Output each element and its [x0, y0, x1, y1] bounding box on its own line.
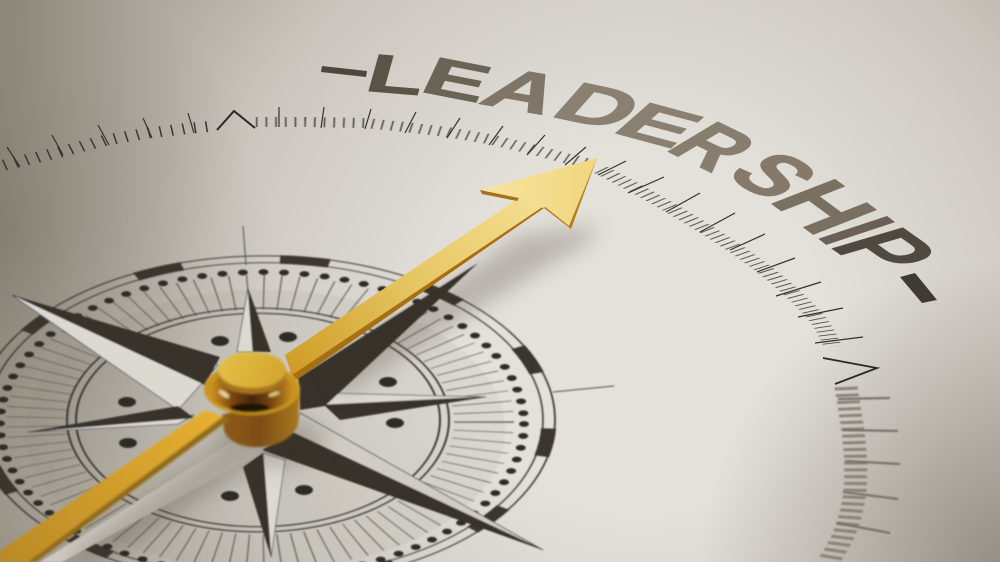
inner double ring: [67, 308, 449, 532]
needle shadow: [60, 225, 600, 562]
arrow head: [480, 158, 597, 226]
letter S: S: [706, 141, 841, 210]
minor ticks: left section: [4, 126, 216, 165]
compass rose dial: [0, 226, 614, 562]
lower major ticks: [837, 398, 900, 533]
hub cap side: [218, 358, 286, 394]
dots ring: [0, 272, 524, 562]
hub highlights: [218, 389, 230, 399]
hub cap: [218, 352, 286, 388]
letter I: I: [793, 206, 921, 255]
needle shaft: [285, 198, 544, 375]
needle shaft edge: [290, 205, 544, 380]
letter R: R: [648, 111, 778, 182]
major ticks: [7, 107, 863, 343]
hub flange recess: [210, 370, 294, 412]
arrow head edge: [544, 158, 597, 229]
gold compass needle: [0, 158, 597, 562]
letter A: A: [468, 57, 578, 127]
leading dash: [321, 66, 367, 77]
minor ticks: lower right section: [828, 387, 856, 562]
needle tail: [0, 410, 230, 562]
hub flange: [204, 363, 300, 415]
south-west light band: [40, 437, 265, 562]
letter H: H: [746, 168, 902, 246]
arrow barb edge: [480, 190, 519, 201]
inner dots: [118, 332, 404, 501]
letter E: E: [413, 46, 501, 114]
light star facets: [12, 288, 543, 557]
minor ticks: middle section: [256, 122, 590, 164]
dark star facets: [12, 263, 543, 557]
minor ticks: right section: [601, 170, 833, 347]
letter L: L: [360, 44, 433, 107]
letter D: D: [538, 71, 658, 142]
hub dark band: [230, 404, 270, 412]
hub: [204, 352, 300, 447]
tick scale arc: [4, 107, 900, 562]
outer ring: [0, 256, 555, 562]
title: LEADERSHIP curved lettering: [321, 44, 966, 303]
letter P: P: [804, 218, 966, 284]
shading under dial: [25, 290, 505, 562]
north and east pointer lines: [243, 226, 614, 392]
hub lower body: [222, 392, 300, 447]
trailing dash: [900, 273, 937, 303]
letter E: E: [598, 92, 719, 159]
top peak marker: [217, 111, 255, 130]
radial spokes: [36, 292, 484, 552]
compass star points: [12, 263, 543, 562]
right peak marker: [823, 358, 877, 384]
